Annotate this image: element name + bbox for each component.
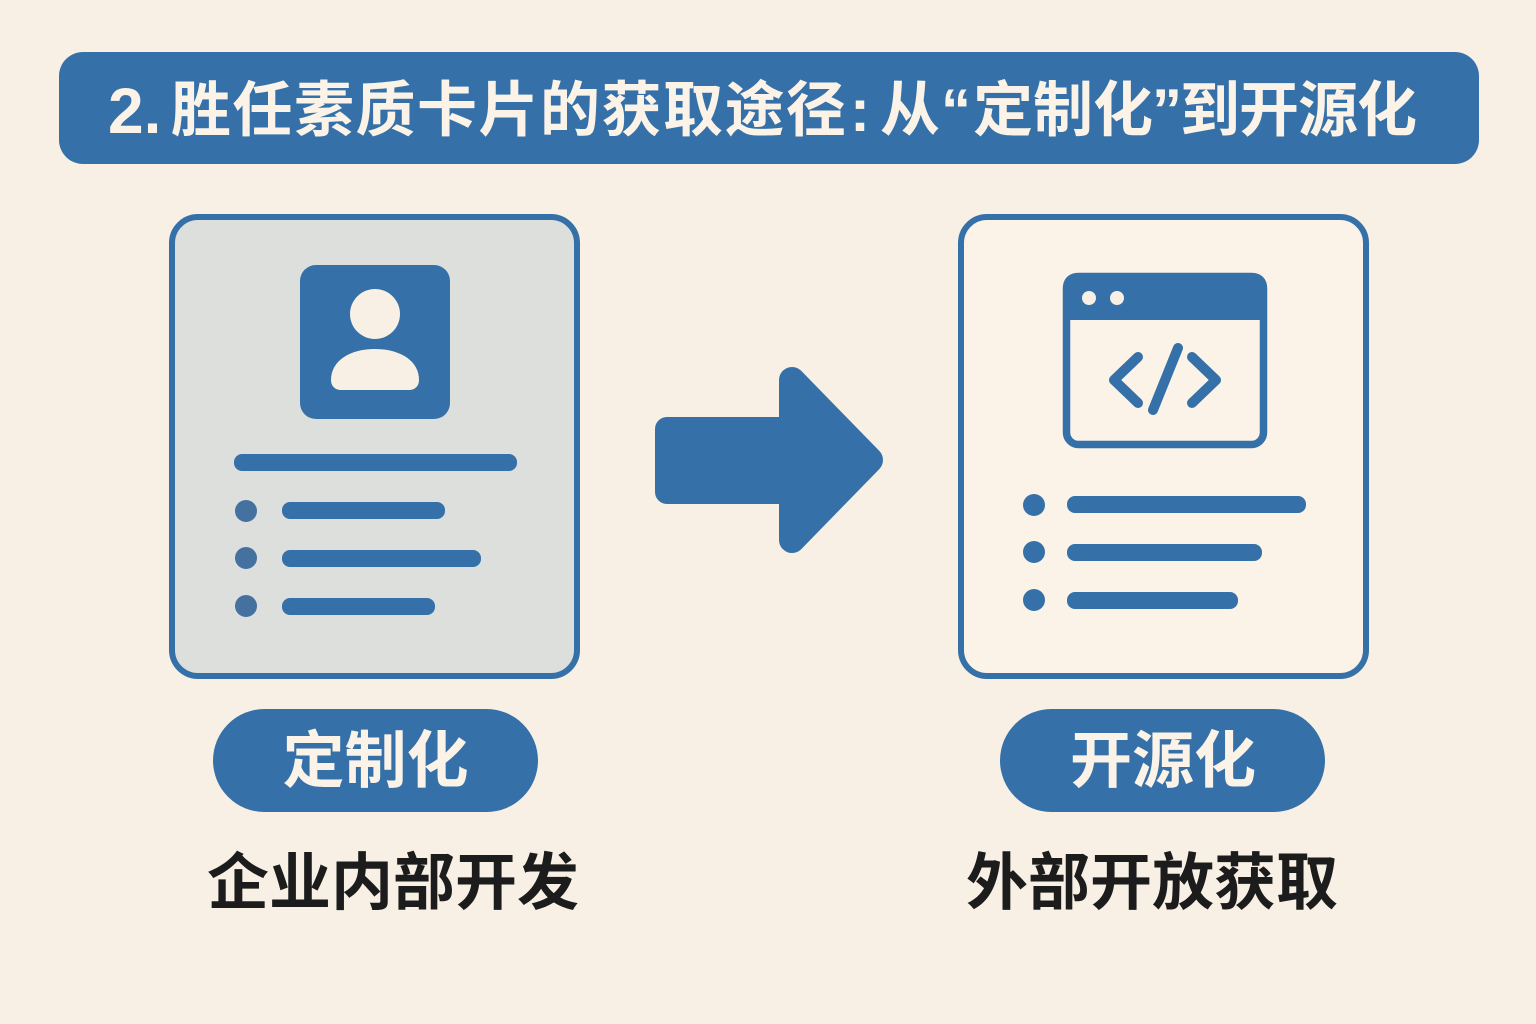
pill: customized: 定制化 [282,727,468,796]
caption: external acquisition: 外部开放获取 [966,849,1338,918]
title: 定制化 [973,77,1153,144]
title: 2. [108,75,161,147]
panel: open source card [961,217,1366,676]
title: 到开源化 [1180,77,1416,144]
icon: person profile [300,265,450,419]
title [108,75,1416,147]
title: “ [941,77,971,144]
arrow [655,380,870,540]
icon: code window [1063,273,1267,444]
pill: open source [1000,709,1325,812]
title: 从 [880,77,940,144]
text lines: customized card [234,454,517,617]
text lines: open source card [1023,494,1306,611]
panel: customized card [172,217,577,676]
title banner [59,52,1479,164]
pill: open source: 开源化 [1070,727,1256,796]
pill: customized [213,709,538,812]
title: : [850,77,870,144]
title: 胜任素质卡片的获取途径 [171,77,848,144]
title: ” [1152,77,1182,144]
caption: internal development: 企业内部开发 [207,849,579,918]
